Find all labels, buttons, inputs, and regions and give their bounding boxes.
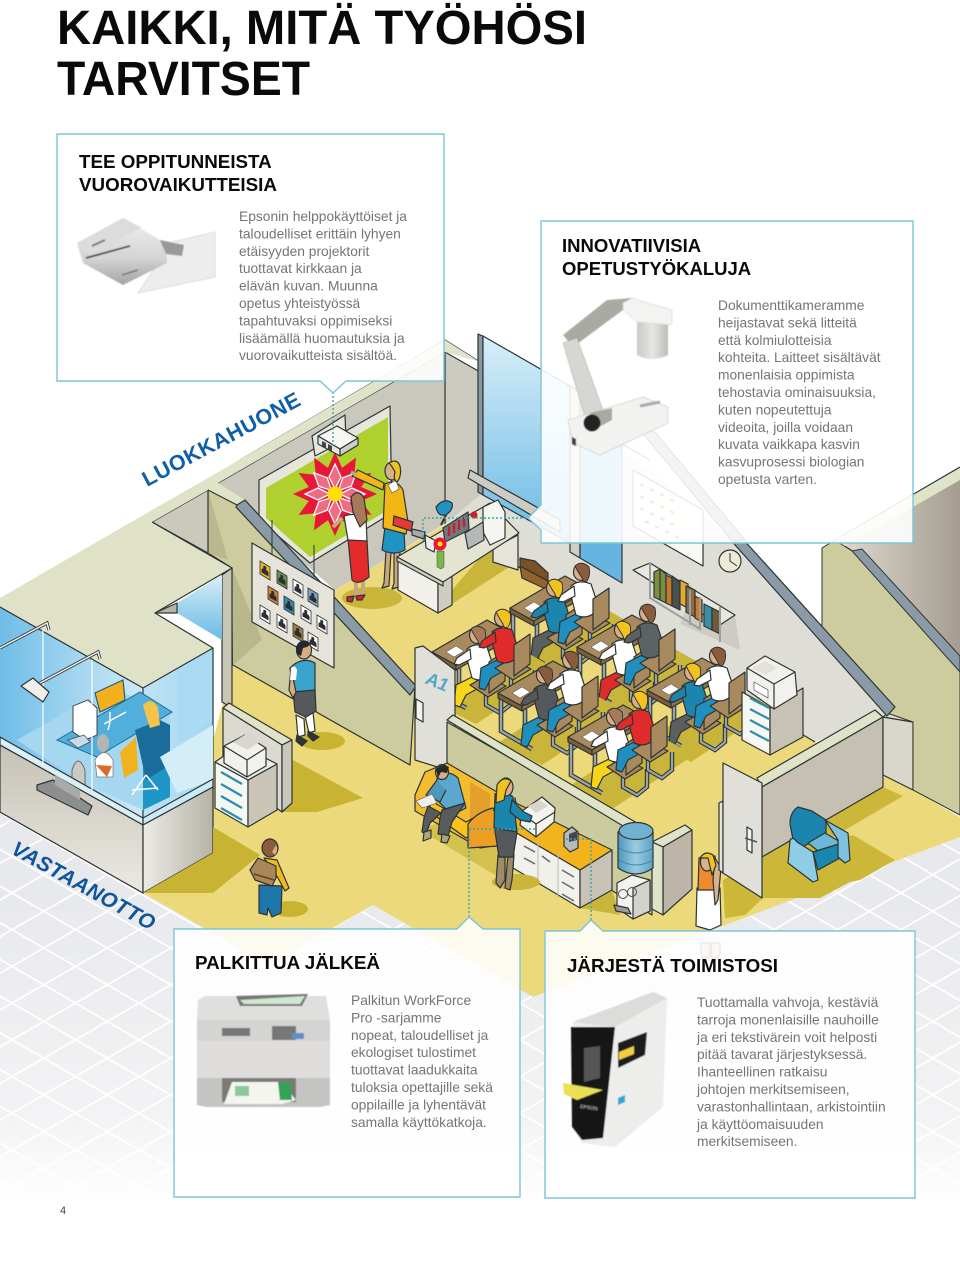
- heading: INNOVATIIVISIA: [562, 235, 701, 256]
- body text: merkitsemiseen.: [697, 1134, 797, 1149]
- panel: award-winning footprint: [174, 917, 520, 1197]
- body text: Pro -sarjamme: [351, 1010, 442, 1025]
- title: KAIKKI, MITÄ TYÖHÖSI: [57, 2, 587, 55]
- product: projector: [77, 218, 215, 293]
- body text: opetusta varten.: [718, 472, 817, 487]
- reception roof and glass: [0, 478, 232, 825]
- wall end: [652, 825, 692, 915]
- body text: pitää tavarat järjestyksessä.: [697, 1047, 867, 1062]
- body text: ja eri tekstivärein voit helposti: [696, 1030, 877, 1045]
- body text: että kolmiulotteisia: [718, 333, 832, 348]
- floor tiles: [0, 812, 960, 1261]
- body text: johtojen merkitsemiseen,: [696, 1082, 850, 1097]
- body text: tarroja monenlaisille nauhoille: [697, 1012, 879, 1027]
- body text: lisäämällä huomautuksia ja: [239, 331, 405, 346]
- body text: opetus yhteistyössä: [239, 296, 361, 311]
- body text: Palkitun WorkForce: [351, 993, 471, 1008]
- classroom back wall: [208, 340, 887, 742]
- title: TARVITSET: [57, 53, 310, 106]
- door A1: [415, 646, 455, 775]
- bulletin board: [252, 520, 334, 668]
- counter with printer: [513, 797, 612, 908]
- label: reception: VASTAANOTTO: [8, 837, 159, 935]
- wall and armchair shadow: [723, 787, 903, 918]
- panel: organise your office: [545, 920, 915, 1198]
- sofa and seated man: [415, 763, 520, 878]
- body text: Dokumenttikameramme: [718, 298, 865, 313]
- body text: Epsonin helppokäyttöiset ja: [239, 209, 407, 224]
- student at board: [333, 493, 369, 602]
- heading: JÄRJESTÄ TOIMISTOSI: [567, 955, 778, 976]
- panel: interactive lessons: [57, 134, 444, 393]
- body text: heijastavat sekä litteitä: [718, 315, 857, 330]
- boy at bulletin board: [289, 641, 345, 750]
- body text: taloudelliset erittäin lyhyen: [239, 226, 401, 241]
- classroom partition: [208, 490, 416, 765]
- body text: tehostavia ominaisuuksia,: [718, 385, 876, 400]
- water cooler: [614, 822, 653, 919]
- teacher: [351, 461, 413, 589]
- body text: Tuottamalla vahvoja, kestäviä: [697, 995, 879, 1010]
- right olive wall: [728, 467, 960, 815]
- body text: kohteita. Laitteet sisältävät: [718, 350, 881, 365]
- bookshelf: [633, 563, 740, 650]
- body text: tuottavat kirkkaan ja: [239, 261, 362, 276]
- standing woman: [696, 853, 721, 960]
- label: classroom: LUOKKAHUONE: [138, 387, 305, 491]
- door A1: A1: [422, 669, 453, 695]
- body text: videoita, joilla voidaan: [718, 420, 853, 435]
- corridor printer on cabinet: [215, 733, 277, 827]
- body text: oppilaille ja lyhentävät: [351, 1097, 486, 1112]
- body text: varastonhallintaan, arkistointiin: [697, 1099, 886, 1114]
- yellow floor: [143, 524, 960, 997]
- whiteboard: [259, 406, 392, 563]
- clock: [719, 550, 741, 572]
- printer partition: [223, 703, 363, 812]
- product: label printer: [563, 992, 667, 1147]
- reception shadow: [143, 827, 260, 893]
- heading: TEE OPPITUNNEISTA: [79, 151, 272, 172]
- heading: OPETUSTYÖKALUJA: [562, 258, 751, 279]
- body text: vuorovaikutteista sisältöä.: [239, 348, 397, 363]
- body text: Ihanteellinen ratkaisu: [697, 1065, 827, 1080]
- connector lines: [333, 392, 591, 920]
- body text: kuten nopeutettuja: [718, 402, 832, 417]
- body text: kasvuprosessi biologian: [718, 455, 864, 470]
- wall-mounted projector: [312, 415, 358, 456]
- body text: tuloksia opettajille sekä: [351, 1080, 493, 1095]
- woman at counter: [492, 778, 540, 890]
- body text: ekologiset tulostimet: [351, 1045, 476, 1060]
- heading: PALKITTUA JÄLKEÄ: [195, 952, 380, 973]
- classroom printer on cabinet: [742, 656, 803, 755]
- students at desks: [432, 563, 773, 809]
- ceiling projector arms: [0, 623, 100, 702]
- body text: nopeat, taloudelliset ja: [351, 1028, 489, 1043]
- reception counter: [0, 745, 213, 893]
- product: label printer: EPSON: [580, 1104, 598, 1112]
- reception interior: [0, 630, 213, 825]
- body text: samalla käyttökatkoja.: [351, 1115, 487, 1130]
- floor shadow under teacher and student: [342, 587, 402, 609]
- flower on board: [293, 452, 377, 536]
- panel: innovative tools: [528, 221, 913, 543]
- body text: tuottavat laadukkaita: [351, 1063, 478, 1078]
- door and right wall: [719, 709, 913, 898]
- corridor wall: [447, 715, 652, 915]
- blue armchair: [788, 807, 850, 882]
- counter shadow: [513, 868, 620, 915]
- body text: etäisyyden projektorit: [239, 244, 370, 259]
- windows: [468, 334, 622, 583]
- page number: 4: [60, 1205, 66, 1217]
- body text: tapahtuvaksi oppimiseksi: [239, 313, 392, 328]
- body text: ja käyttöomaisuuden: [696, 1117, 824, 1132]
- wall cutaway band: [640, 430, 745, 541]
- body text: monenlaisia oppimista: [718, 368, 855, 383]
- product: document camera: [563, 298, 672, 455]
- boy with backpack: [250, 839, 308, 917]
- briefcase: [520, 558, 548, 590]
- product: multifunction printer: [197, 994, 330, 1107]
- body text: kuvata vaikkapa kasvin: [718, 437, 860, 452]
- poster: letter chart: [633, 470, 703, 566]
- title: [57, 2, 587, 106]
- teacher desk with equipment: [397, 500, 520, 613]
- heading: VUOROVAIKUTTEISIA: [79, 174, 277, 195]
- body text: elävän kuvan. Muunna: [239, 279, 378, 294]
